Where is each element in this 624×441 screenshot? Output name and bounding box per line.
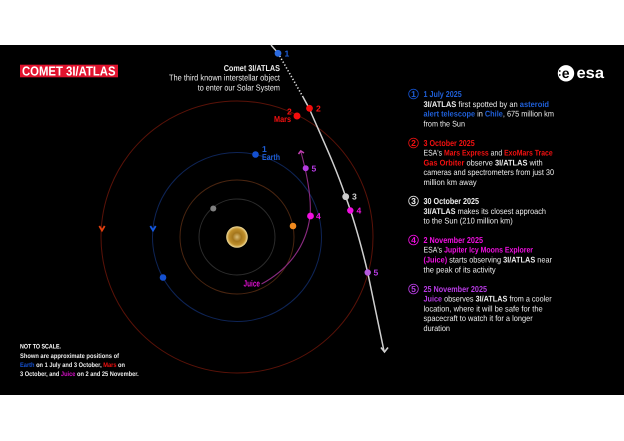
planet: Mercury: [210, 206, 216, 212]
comet position 5: 5: [374, 268, 378, 278]
planet: Mars: Mars: [274, 114, 291, 124]
orbit: Venus: [180, 180, 294, 294]
orbit: Mars: [101, 101, 373, 373]
event 4: [409, 235, 552, 274]
event 1: from the Sun: [424, 119, 465, 128]
comet description: [169, 63, 281, 92]
planet: Earth 3 October: [160, 274, 166, 281]
event 3: 3I/ATLAS makes its closest approach: [424, 207, 546, 216]
event 4: the peak of its activity: [424, 265, 497, 274]
ESA logo: e: [562, 65, 570, 81]
Juice position 5: 5: [312, 163, 316, 173]
scale note: Earth on 1 July and 3 October, Mars on: [20, 362, 125, 369]
title badge: COMET 3I/ATLAS: [22, 64, 116, 78]
event 2: cameras and spectrometers from just 30: [424, 168, 554, 177]
comet position 4: [347, 206, 362, 216]
scale note: Shown are approximate positions of: [20, 353, 120, 360]
event 4: ESA's Jupiter Icy Moons Explorer: [424, 246, 534, 255]
event 3: 3: [411, 196, 416, 206]
planet: Mars: 2: [287, 106, 292, 116]
event 1: alert telescope in Chile, 675 million km: [424, 110, 554, 118]
Juice label: Juice: [244, 278, 260, 288]
event 2: Gas Orbiter observe 3I/ATLAS with: [424, 158, 543, 167]
event 1: 1 July 2025: [424, 89, 462, 99]
comet position 1: [275, 48, 290, 58]
event 1: 3I/ATLAS first spotted by an asteroid: [424, 100, 549, 109]
event 2: 3 October 2025: [424, 138, 475, 148]
Juice position 4: [307, 211, 321, 221]
planet: Earth 1 July: Earth: [262, 152, 280, 162]
event 5: duration: [424, 324, 450, 333]
event 2: 2: [411, 138, 416, 148]
comet description: to enter our Solar System: [198, 82, 280, 92]
comet description: The third known interstellar object: [169, 73, 281, 83]
icon: Earth direction arrow: [150, 226, 156, 230]
event 3: [409, 196, 546, 226]
event 1: 1: [411, 89, 416, 99]
event 3: to the Sun (210 million km): [424, 216, 513, 226]
event 5: spacecraft to watch it for a longer: [424, 314, 533, 323]
Juice position 5: [303, 163, 316, 173]
event 3: 30 October 2025: [424, 196, 479, 206]
event 5: [409, 284, 552, 333]
event 1: [409, 89, 554, 128]
comet description: Comet 3I/ATLAS: [224, 63, 280, 73]
comet position 1: 1: [284, 48, 290, 58]
event 2: [409, 138, 554, 187]
comet position 2: 2: [316, 103, 321, 113]
event 5: 5: [411, 284, 416, 294]
comet position 5: [364, 268, 378, 278]
orbit: Earth: [152, 152, 322, 322]
event 4: 4: [411, 235, 416, 245]
scale note: 3 October, and Juice on 2 and 25 November.: [20, 371, 139, 378]
Juice position 4: 4: [316, 211, 321, 221]
comet trajectory: [271, 45, 388, 352]
planet: Earth 1 July: 1: [262, 144, 267, 154]
event 5: Juice observes 3I/ATLAS from a cooler: [424, 295, 552, 304]
event 4: (Juice) starts observing 3I/ATLAS near: [424, 256, 552, 264]
icon: Mars direction arrow: [99, 226, 105, 230]
event 5: 25 November 2025: [424, 284, 487, 294]
Sun: [226, 226, 248, 248]
event 5: location, where it will be safe for the: [424, 304, 543, 314]
comet position 3: 3: [352, 192, 357, 202]
planet: Earth 1 July: [252, 144, 280, 162]
scale note: NOT TO SCALE.: [20, 343, 61, 350]
comet position 3: [342, 192, 357, 202]
black background panel: [0, 45, 624, 395]
ESA logo: [558, 65, 604, 82]
planet: Mars: [274, 106, 300, 124]
comet position 4: 4: [356, 206, 362, 216]
planet: Venus: [290, 223, 296, 229]
event 4: 2 November 2025: [424, 235, 483, 245]
event 2: million km away: [424, 178, 478, 187]
orbit: Mercury: [199, 199, 275, 275]
event 2: ESA's Mars Express and ExoMars Trace: [424, 148, 553, 158]
comet position 2: [306, 103, 321, 113]
ESA logo: esa: [576, 65, 604, 82]
scale note: [20, 343, 139, 378]
Juice trajectory: [262, 151, 310, 284]
